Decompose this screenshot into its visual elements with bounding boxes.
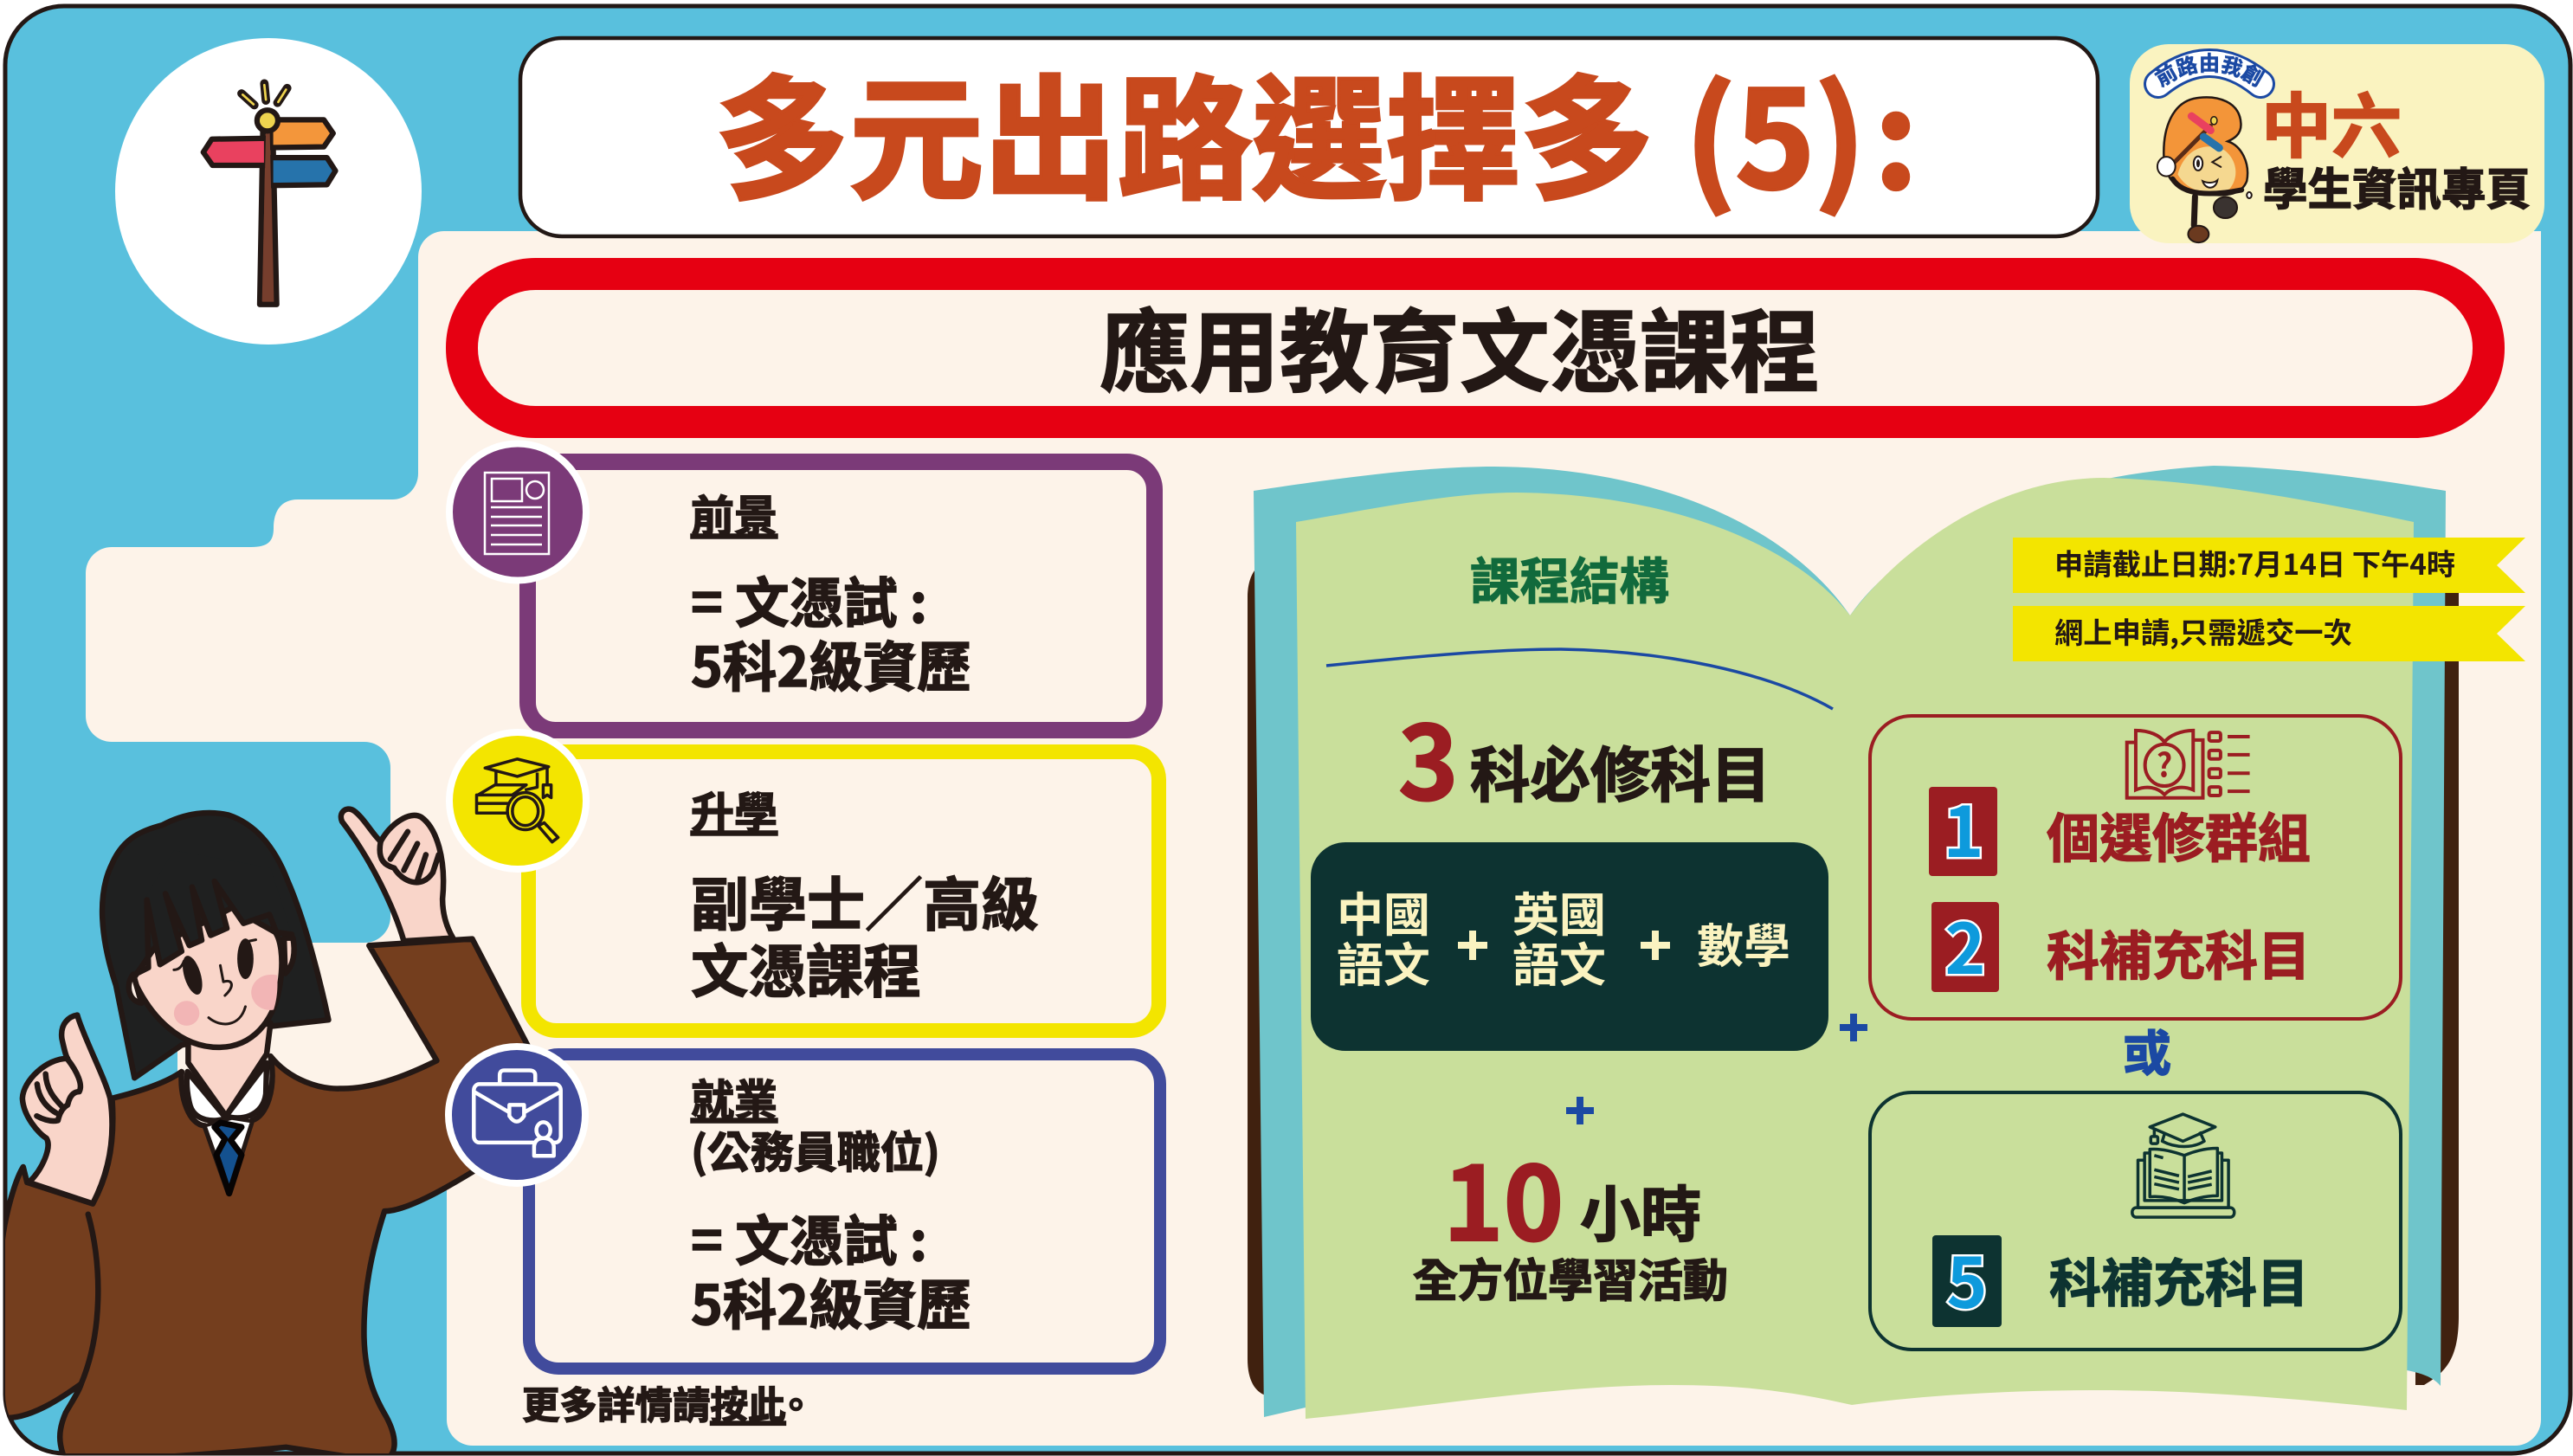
- collar: [187, 1072, 226, 1121]
- mascot badge: 前路由我創: 前路由我創: [2154, 52, 2265, 88]
- book teal pages: [1254, 466, 2446, 1417]
- icon: newspaper: [449, 443, 586, 580]
- icon: briefcase: [448, 1047, 585, 1183]
- panel: applied learning option: [1870, 1092, 2401, 1350]
- icon: book with cap: [2132, 1114, 2234, 1217]
- badge: 2: [1931, 894, 1999, 995]
- subject heading text: 應用教育文憑課程: [1099, 280, 1820, 410]
- text: 5科2級資歷: 5科2級資歷: [691, 623, 971, 702]
- ribbon: online application: [2013, 606, 2525, 661]
- sweater: [2, 939, 527, 1456]
- icon: book with question: [2127, 731, 2250, 798]
- icon: graduation search: [449, 732, 586, 869]
- hair back: [102, 813, 328, 1078]
- heading: 課程結構: 課程結構: [1470, 541, 1669, 614]
- school name: 中六: [2261, 71, 2402, 172]
- 10 hours: 10: [1443, 1122, 1564, 1270]
- text: 副學士／高級: 副學士／高級: [691, 859, 1039, 943]
- raised hand: [341, 809, 453, 941]
- panel: elective option: [1870, 716, 2401, 1019]
- text: 公務員職位: (公務員職位): [691, 1118, 940, 1181]
- heading: 3 core subjects: 科必修科目: [1470, 727, 1771, 815]
- cheeks: [174, 1001, 199, 1026]
- shirt: [206, 1118, 250, 1151]
- 10 hours: [1443, 1122, 1701, 1270]
- text: 數學: 數學: [1697, 908, 1790, 976]
- text: 文憑試: = 文憑試 :: [691, 1197, 927, 1276]
- text: 升學: 升學: [691, 779, 777, 841]
- logo panel: [2130, 44, 2544, 244]
- subject heading pill: [462, 274, 2488, 422]
- badge: 1: 1: [1943, 777, 1984, 878]
- heading: 3 core subjects: 3: [1398, 681, 1459, 829]
- text: 5科2級資歷: 5科2級資歷: [691, 1261, 971, 1340]
- text: 英國語文: [1512, 877, 1606, 995]
- text: 科補充科目: 科補充科目: [2047, 913, 2311, 990]
- book illustration: [1248, 466, 2459, 1419]
- text: 就業: 就業: [691, 1066, 777, 1129]
- character: student: [2, 809, 527, 1456]
- text: 英國語文: 語文: [1512, 927, 1606, 995]
- right ear: [284, 938, 294, 973]
- panel: 就業: [448, 1047, 1160, 1369]
- eyes: [183, 956, 203, 995]
- book cover: [1248, 563, 2459, 1395]
- text: 中國語文: 語文: [1337, 927, 1430, 995]
- other learning experiences: 全方位學習活動: [1413, 1245, 1728, 1310]
- left ear: [129, 975, 141, 1003]
- icon: book with question: ?: [2157, 738, 2172, 787]
- book green pages: [1296, 478, 2414, 1419]
- text: 文憑課程: 文憑課程: [691, 926, 921, 1009]
- fringe: [158, 907, 253, 960]
- core subjects box: [1311, 842, 1828, 1051]
- badge: 5: 5: [1946, 1228, 1988, 1329]
- ribbon: deadline: 申請截止日期:7月14日 下午4時: [2054, 541, 2455, 583]
- or: 或: [2123, 1015, 2171, 1086]
- badge: 5: [1932, 1228, 2002, 1329]
- title text: 多元出路選擇多 (5):: [715, 32, 1918, 227]
- heading: 3 core subjects: [1398, 681, 1771, 829]
- text: 前景: 前景: [691, 482, 777, 544]
- neck: [188, 1023, 270, 1116]
- curve divider: [1326, 649, 1833, 709]
- mascot: [2157, 97, 2252, 242]
- nose and mouth: [209, 965, 245, 1024]
- text: 中國語文: [1337, 877, 1430, 995]
- ribbon: online application: 網上申請,只需遞交一次: [2054, 609, 2352, 652]
- text: 個選修群組: 個選修群組: [2047, 796, 2311, 873]
- page name: 學生資訊專頁: [2263, 153, 2531, 218]
- text: 中國語文: 中國: [1337, 877, 1430, 945]
- text: 文憑試: = 文憑試 :: [691, 559, 927, 638]
- badge: 2: 2: [1944, 894, 1986, 995]
- text: 英國語文: 英國: [1512, 877, 1606, 945]
- thumbs-up hand: [23, 1015, 112, 1203]
- more details link: 更多詳情請按此。: [522, 1375, 815, 1430]
- plus: to activities: [1566, 1097, 1594, 1124]
- 10 hours: 小時: [1580, 1167, 1701, 1254]
- plus: [1641, 931, 1670, 960]
- badge: 1: [1929, 777, 1997, 878]
- text: 科補充科目: 科補充科目: [2049, 1242, 2309, 1317]
- icon: signpost in white circle: [115, 38, 422, 345]
- title box: [520, 32, 2098, 236]
- plus: [1458, 931, 1487, 960]
- cream content panel: [86, 231, 2541, 1446]
- ribbon: deadline: [2013, 538, 2525, 593]
- plus: to electives: [1840, 1014, 1867, 1041]
- tie: [215, 1123, 242, 1194]
- panel: 前景: [449, 443, 1155, 731]
- face: [133, 908, 281, 1047]
- panel: 升學: [449, 732, 1158, 1030]
